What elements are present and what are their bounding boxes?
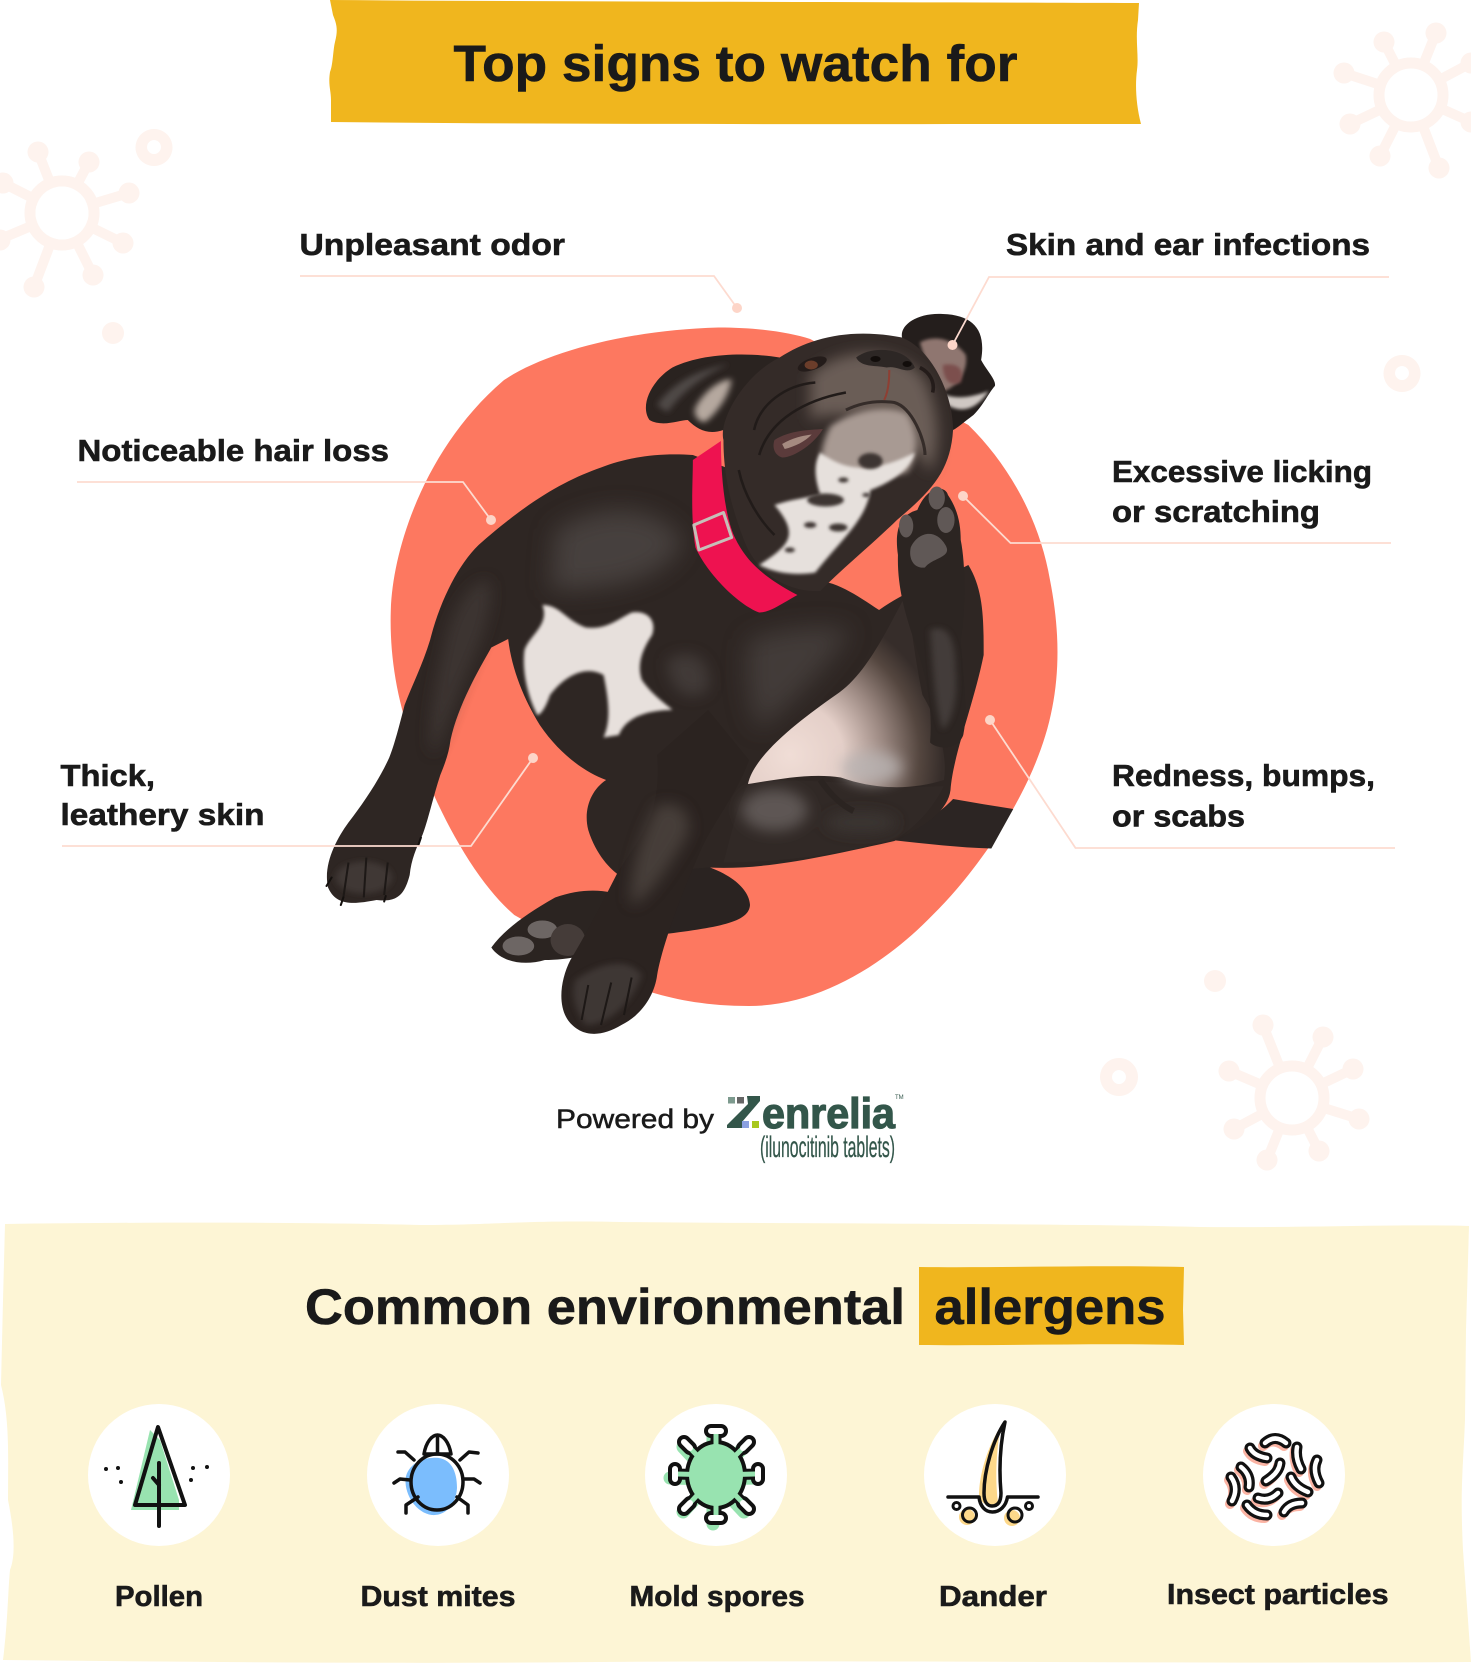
dog: main body and front leg (327, 454, 984, 903)
panel background (1, 1222, 1471, 1663)
label: thick leathery skin: leathery skin (60, 797, 264, 832)
heading: Common environmental (305, 1279, 905, 1335)
dog: nose and mouth (856, 350, 915, 370)
callout leader: noticeable hair loss (77, 482, 496, 525)
dog: pale belly (748, 592, 945, 787)
icon: pollen tree (88, 1404, 230, 1546)
allergen: dander (924, 1404, 1066, 1613)
background virus decorations (0, 22, 1471, 1170)
dog: raised scratching leg (897, 486, 965, 747)
label: Mold spores (630, 1581, 804, 1613)
icon: hair follicle (924, 1404, 1066, 1546)
callout leader: thick skin (62, 753, 538, 846)
callout leader: skin and ear infections (948, 277, 1389, 350)
dog: left ear (646, 355, 780, 432)
dog: eyes (796, 353, 829, 375)
coral blob behind dog (391, 328, 1057, 1006)
logo wordmark: enrelia (762, 1090, 896, 1138)
dog: toes of foreground paw (582, 978, 632, 1025)
dog: hind leg sheen (741, 789, 897, 834)
allergen: pollen (88, 1404, 230, 1613)
callout leader: unpleasant odor (300, 276, 742, 313)
powered by text: Powered by (556, 1104, 715, 1134)
dog: chin dark markings (785, 453, 883, 552)
decoration: ring right (1384, 355, 1421, 392)
dog: face wrinkles (739, 382, 846, 535)
dog: muzzle (820, 409, 916, 477)
label: Dust mites (360, 1581, 516, 1613)
dog illustration (327, 314, 1013, 1034)
allergen: mold spores (630, 1404, 804, 1613)
allergen: insect particles (1167, 1404, 1388, 1611)
label: excessive licking or scratching: or scratching (1112, 494, 1320, 529)
dog: head sheen (810, 353, 937, 472)
label: unpleasant odor: Unpleasant odor (300, 227, 565, 262)
dog: right ear (902, 314, 995, 430)
callout leader: excessive licking (958, 491, 1391, 543)
title banner (329, 0, 1141, 124)
dog: head (723, 334, 953, 591)
decoration: virus bottom right (1218, 1014, 1370, 1170)
decoration: ring and dot bottom right (1100, 970, 1226, 1096)
dog: foreground front leg and paw (561, 710, 749, 1034)
label: Dander (939, 1581, 1047, 1613)
dog: red collar (692, 441, 797, 612)
dog: rear paw (491, 891, 627, 963)
allergen: dust mites (360, 1404, 516, 1613)
icon: dust mite (367, 1404, 509, 1546)
banner background (329, 0, 1141, 124)
label: Insect particles (1167, 1579, 1388, 1611)
label: Pollen (115, 1581, 203, 1613)
label: redness bumps or scabs: or scabs (1112, 798, 1245, 834)
powered by logo (556, 1090, 904, 1164)
decoration: virus top right (1334, 22, 1471, 178)
title text: Top signs to watch for (454, 35, 1018, 92)
decoration: ring and dot left (102, 129, 173, 344)
dog: front left paw details (327, 838, 421, 905)
dog: silver fur patch (841, 752, 902, 784)
highlight behind allergens (919, 1266, 1184, 1345)
icon: insect particles (1203, 1404, 1345, 1546)
label: excessive licking or scratching: Excessive licking (1112, 454, 1372, 489)
label: skin and ear infections: Skin and ear infections (1006, 227, 1370, 262)
dog: far hind leg extended (892, 799, 1013, 848)
logo mark (727, 1096, 760, 1128)
logo tagline: (ilunocitinib tablets) (760, 1131, 895, 1164)
heading (305, 1279, 1166, 1335)
icon: mold spore (645, 1404, 787, 1546)
callout leader: redness (985, 715, 1395, 848)
label: excessive licking or scratching (1112, 454, 1372, 529)
label: thick leathery skin: Thick, (60, 758, 155, 793)
dog: thigh fold (820, 780, 854, 811)
label: redness bumps or scabs (1112, 758, 1375, 834)
label: thick leathery skin (60, 758, 264, 832)
heading: allergens (934, 1279, 1166, 1335)
label: noticeable hair loss: Noticeable hair loss (78, 433, 389, 468)
dog: white chest patch (524, 605, 672, 738)
dog: fur sheen (430, 510, 851, 755)
logo trademark: TM (895, 1095, 904, 1101)
dog: under thigh (652, 865, 750, 935)
decoration: virus left (0, 142, 140, 298)
label: redness bumps or scabs: Redness, bumps, (1112, 758, 1375, 793)
dog: neck white fur (759, 452, 915, 574)
callout lines and dots (62, 276, 1395, 848)
allergens panel (1, 1222, 1471, 1663)
dog: hind leg (723, 780, 944, 862)
